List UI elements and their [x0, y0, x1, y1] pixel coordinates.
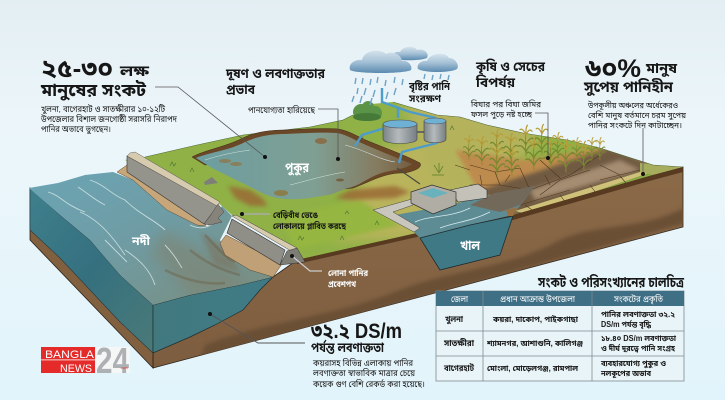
stat: 60 percent — [583, 55, 687, 130]
row: Khulna: কয়রা, দাকোপ, পাইকগাছা — [492, 315, 579, 324]
levee 1 — [127, 152, 224, 225]
label: crops burning: ফসল পুড়ে নষ্ট হচ্ছে — [470, 110, 532, 120]
label: crops burning — [470, 100, 541, 120]
tank connector — [417, 131, 424, 133]
row: Satkhira: শ্যামনগর, আশাশুনি, কালিগঞ্জ — [486, 339, 583, 348]
stat: 32.2 DS/m: ৩২.২ DS/m — [311, 320, 402, 343]
label: crops burning: বিঘার পর বিঘা জমির — [470, 100, 541, 109]
stat: 32.2 DS/m: কয়েক গুণ বেশি রেকর্ড করা হয়েছে। — [312, 379, 425, 389]
table header: জেলা — [451, 294, 469, 304]
row: Khulna: খুলনা — [445, 314, 464, 325]
darker soil stratum — [200, 205, 690, 360]
label: saline inlet: প্রবেশপথ — [328, 279, 357, 289]
pond details — [205, 138, 395, 196]
land surface — [125, 102, 682, 258]
table title: সংকট ও পরিসংখ্যানের চালচিত্র — [537, 274, 684, 290]
field grass tufts — [170, 126, 454, 240]
sand bank 1 — [117, 165, 212, 226]
table — [436, 291, 684, 381]
heading: pollution and salinity — [225, 66, 325, 97]
row: Bagerhat: নলকূপের অভাব — [600, 369, 651, 379]
rain — [352, 74, 449, 105]
label: rainwater harvesting: সংরক্ষণ — [408, 94, 441, 105]
row: Khulna: DS/m পর্যন্ত বৃদ্ধি — [601, 319, 652, 330]
row: Satkhira: ১৮.৪০ DS/m লবণাক্ততা — [601, 334, 677, 343]
sluice gate — [373, 184, 487, 232]
logo: NEWS — [60, 363, 92, 375]
stat: 25-30 lakh: খুলনা, বাগেরহাট ও সাতক্ষীরার ১০-১২টি — [41, 104, 165, 115]
muddy patches by the pond — [228, 186, 410, 206]
heading: pollution and salinity: দূষণ ও লবণাক্ততার — [225, 66, 325, 81]
canal waves — [415, 208, 490, 228]
label: pond: পুকুর — [285, 160, 309, 176]
stat: 32.2 DS/m: লবণাক্ততা স্বাভাবিক মাত্রার চেয়ে — [312, 368, 416, 378]
label: rainwater harvesting — [408, 79, 450, 105]
label: saline inlet — [328, 268, 369, 289]
label: embankment breach — [273, 209, 346, 231]
river waves — [48, 180, 215, 285]
river surface — [29, 172, 272, 305]
row: Khulna: পানির লবণাক্ততা ৩২.২ — [601, 310, 675, 319]
canal bank stub — [506, 207, 518, 216]
table header — [436, 291, 684, 306]
river front water face — [153, 277, 273, 353]
tank 1 — [383, 120, 417, 144]
stat: 32.2 DS/m — [311, 320, 425, 389]
stat: 25-30 lakh — [40, 55, 177, 135]
canal water — [395, 186, 535, 238]
label: lost potability: পানযোগ্যতা হারিয়েছে — [248, 105, 316, 115]
land brown edge — [297, 167, 683, 264]
logo — [41, 340, 130, 381]
logo: 24 — [96, 340, 129, 381]
stat: 25-30 lakh: মানুষের সংকট — [40, 80, 147, 101]
label: embankment breach: বেড়িবাঁধ ভেঙে — [273, 209, 318, 221]
river left soil face — [30, 188, 153, 368]
stat: 25-30 lakh: ২৫-৩০ — [41, 55, 113, 83]
water pipes — [355, 88, 437, 163]
stat: 60 percent: পানির সংকটে দিন কাটাচ্ছেন। — [588, 121, 682, 130]
row: Bagerhat — [443, 359, 666, 379]
heading: agriculture and irrigation — [475, 59, 545, 90]
sand bank 2 — [220, 235, 282, 277]
row: Khulna — [445, 310, 675, 330]
logo: BANGLA — [45, 349, 95, 361]
soil cracks — [455, 155, 640, 212]
river silt streaks — [165, 235, 240, 283]
tank 2 — [424, 118, 446, 143]
land outline — [145, 102, 683, 167]
row: Bagerhat: মোংলা, মোড়েলগঞ্জ, রামপাল — [487, 364, 579, 373]
stat: 32.2 DS/m: কয়রাসহ বিভিন্ন এলাকায় পানির — [312, 358, 414, 368]
heading: pollution and salinity: প্রভাব — [226, 82, 255, 97]
row: Bagerhat: ব্যবহারযোগ্য পুকুর ও — [600, 359, 666, 369]
row: Satkhira — [443, 334, 677, 353]
stat: 60 percent: সুপেয় পানিহীন — [583, 78, 674, 97]
row: Bagerhat: বাগেরহাট — [443, 363, 474, 373]
stat: 25-30 lakh: পানির অভাবে ভুগছেন। — [41, 124, 111, 135]
stat: 60 percent: মানুষ — [645, 60, 677, 77]
row: Satkhira: সাতক্ষীরা — [443, 338, 475, 348]
label: canal: খাল — [460, 238, 480, 253]
label: saline inlet: লোনা পানির — [328, 268, 369, 278]
heading: agriculture and irrigation: বিপর্যয় — [475, 75, 516, 90]
pond water — [196, 133, 412, 199]
table header: প্রধান আক্রান্ত উপজেলা — [500, 294, 576, 304]
logo: .com — [120, 366, 128, 370]
soil front face — [153, 167, 683, 368]
stat: 32.2 DS/m: পর্যন্ত লবণাক্ততা — [311, 340, 384, 355]
bush — [353, 101, 382, 121]
stat: 25-30 lakh: উপজেলার বিশাল জনগোষ্ঠী সরাসরি নিরাপদ — [40, 114, 177, 124]
label: river: নদী — [131, 233, 151, 248]
canal front — [420, 216, 513, 270]
clouds — [350, 47, 458, 73]
leader lines — [155, 87, 645, 343]
heading: agriculture and irrigation: কৃষি ও সেচের — [475, 59, 545, 75]
river left water face — [30, 188, 153, 353]
drain pipe to sluice — [397, 168, 420, 184]
stat: 60 percent: বেশি মানুষ বর্তমানে চরম সুপেয় — [588, 110, 687, 121]
levee 2 — [227, 215, 305, 265]
pond rim — [192, 129, 420, 190]
stat: 25-30 lakh: লক্ষ — [119, 63, 150, 80]
stat: 60 percent: ৬০% — [585, 55, 641, 83]
crops — [463, 124, 606, 176]
label: rainwater harvesting: বৃষ্টির পানি — [408, 79, 450, 94]
field seedling — [432, 163, 444, 175]
label: embankment breach: লোকালয়ে প্লাবিত করছে — [273, 220, 346, 231]
illustration: coastal land cross-section — [20, 47, 700, 381]
rock — [204, 177, 218, 185]
row: Satkhira: ও দীর্ঘ দূরত্বে পানি সংগ্রহ — [601, 343, 676, 353]
table header: সংকটের প্রকৃতি — [613, 294, 664, 305]
canal upstream mud — [470, 186, 535, 212]
stat: 60 percent: উপকূলীয় অঞ্চলের অর্ধেকেরও — [587, 100, 678, 111]
